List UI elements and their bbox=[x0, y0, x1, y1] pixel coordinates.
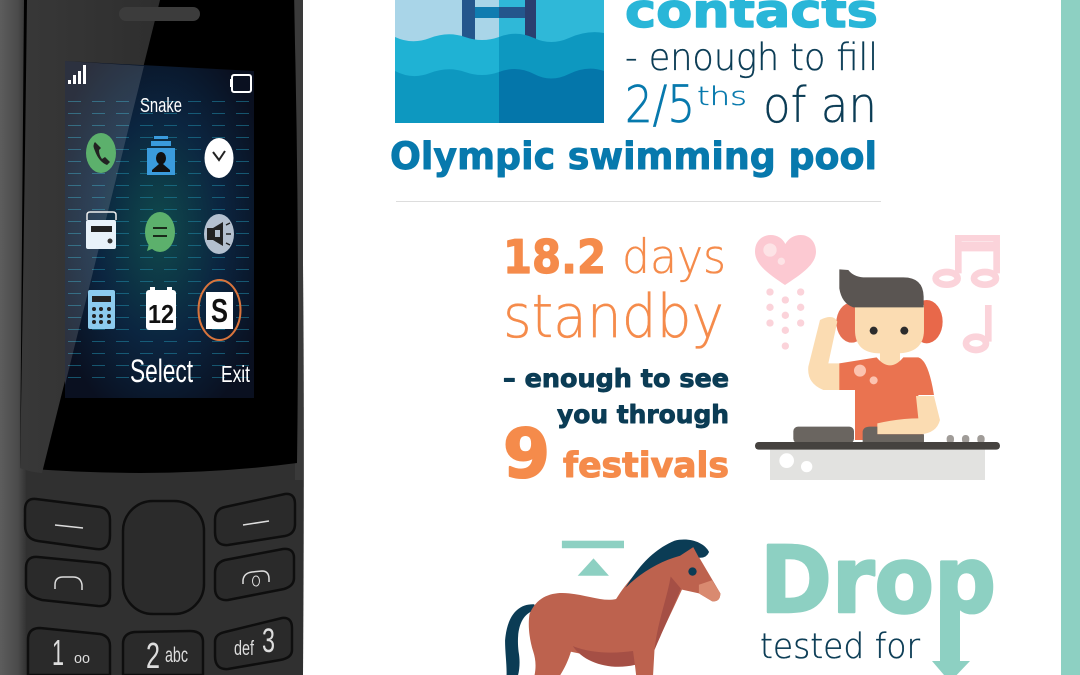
screen title: Snake bbox=[140, 95, 182, 117]
heading: 18.2: 18.2 bbox=[503, 230, 606, 284]
icon: messages bbox=[145, 212, 175, 252]
softkey: Select: Select bbox=[130, 353, 193, 389]
headphones bbox=[836, 300, 943, 343]
eye bbox=[688, 567, 697, 576]
text: festivals: festivals bbox=[563, 446, 729, 486]
table bbox=[770, 449, 985, 480]
arm raised bbox=[808, 317, 840, 390]
arrow: drop down bbox=[932, 600, 970, 675]
icon: clock bbox=[204, 138, 234, 178]
icon: phone bbox=[86, 133, 116, 173]
key 3 bbox=[215, 618, 292, 669]
speaker bbox=[119, 7, 200, 21]
phone bbox=[0, 0, 304, 675]
text: you through: you through bbox=[557, 400, 729, 429]
icon: calculator bbox=[88, 290, 115, 329]
dots bbox=[766, 288, 804, 350]
key 1: oo bbox=[74, 650, 90, 667]
heading: standby: standby bbox=[503, 282, 724, 352]
divider bbox=[396, 201, 881, 202]
icon: calendar bbox=[146, 287, 176, 330]
glass reflection bbox=[20, 0, 160, 473]
raise symbol bbox=[562, 541, 624, 576]
text: two fifths: 2/5 bbox=[625, 76, 695, 135]
ladder bbox=[462, 0, 536, 40]
right softkey bbox=[215, 494, 295, 545]
text: tested for: tested for bbox=[760, 627, 921, 667]
eyes bbox=[870, 327, 908, 335]
front glass bbox=[20, 0, 298, 473]
muzzle bbox=[699, 580, 720, 601]
call key bbox=[26, 557, 110, 606]
key 2 bbox=[123, 631, 203, 675]
signal icon bbox=[68, 65, 86, 84]
keypad bbox=[25, 494, 295, 675]
text: of an: of an bbox=[763, 77, 877, 134]
key 2: 2 bbox=[146, 635, 160, 675]
heart bbox=[755, 235, 816, 285]
key 2: abc bbox=[165, 644, 188, 667]
icon: snake game: S bbox=[211, 292, 228, 329]
icon: horse bbox=[503, 540, 720, 675]
belly shade bbox=[573, 646, 635, 667]
icon: contacts bbox=[147, 136, 175, 175]
lower arm bbox=[877, 396, 940, 434]
heading: Drop: Drop bbox=[760, 527, 996, 634]
battery icon bbox=[230, 75, 251, 92]
key 3: def bbox=[234, 638, 254, 660]
body bbox=[526, 542, 720, 675]
icon: speaker bbox=[204, 214, 234, 254]
number: 9: 9 bbox=[503, 415, 550, 494]
left softkey bbox=[25, 499, 110, 549]
panel: right margin strip bbox=[1061, 0, 1080, 675]
key 1 bbox=[28, 628, 110, 675]
end key bbox=[215, 549, 294, 600]
music notes bbox=[936, 238, 997, 350]
mane bbox=[626, 540, 709, 588]
head bbox=[855, 305, 924, 353]
text: enough to fill: - enough to fill bbox=[625, 36, 878, 79]
icon: swimming pool bbox=[395, 0, 604, 123]
text: enough to see: – enough to see bbox=[503, 364, 729, 393]
key 3: 3 bbox=[262, 622, 275, 660]
neck shade bbox=[654, 576, 681, 650]
key 1: 1 bbox=[52, 632, 64, 673]
tail bbox=[503, 604, 534, 675]
shirt bbox=[839, 357, 934, 440]
icon: DJ illustration bbox=[755, 235, 1000, 480]
highlight ring bbox=[198, 280, 240, 340]
icon: radio bbox=[86, 211, 116, 250]
phone body bbox=[0, 0, 304, 675]
softkey: Exit: Exit bbox=[221, 361, 250, 387]
navigation key bbox=[123, 501, 204, 614]
text: ths: ths bbox=[697, 82, 747, 112]
heading: Olympic swimming pool: Olympic swimming pool bbox=[390, 135, 877, 178]
hair bbox=[839, 269, 924, 307]
heading: days: days bbox=[622, 230, 726, 285]
decks bbox=[793, 427, 985, 443]
phone screen bbox=[65, 61, 254, 398]
neck bbox=[880, 348, 900, 367]
icon: calendar: 12 bbox=[148, 299, 174, 329]
